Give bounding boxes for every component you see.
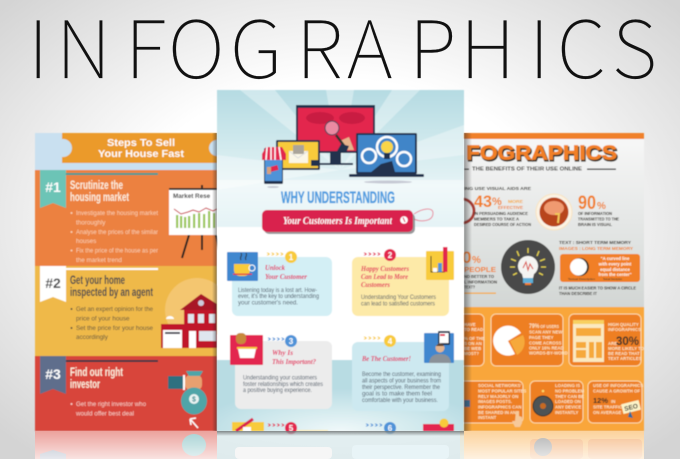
card 1: Listening today is a lost art. How- [238,288,317,294]
step 1: the market trend [76,257,122,264]
card 4: comfortable with your business. [362,398,438,404]
stat people: L INFORMATION [464,280,498,284]
box: site traffic: SITE TRAFFIC [593,404,622,410]
box: loading speed: NO PROBLEM [555,388,585,394]
icon: hand holding money bag: $ [192,396,196,404]
card 4: Be The Customer! [361,354,411,363]
box: partial read [458,314,485,366]
step 2: Get your home [70,273,125,287]
box: loading speed: ANY DEVICE [555,404,581,410]
card 1: Your Customer [265,272,307,281]
box: pie chart: ONLY 16% READ [529,346,564,350]
step 2: #2 [45,275,61,291]
memory comparison: Textual Description [568,277,595,281]
stat 43%: 43 [474,192,492,211]
card 2: Customers [361,280,390,289]
card 4: all aspects of your business from [362,378,441,384]
card 2: ›››› [363,251,382,258]
box: site traffic: IN [611,399,615,404]
step 1: Fix the price of the house as per [76,248,158,254]
box: site traffic: ON AVERAGE [593,410,622,415]
icon: hand holding money bag [168,371,207,414]
memory comparison: Textual Description [603,277,622,281]
stat 43%: DESIRED COURSE OF ACTION [474,222,532,227]
box: social networks [458,381,526,427]
memory comparison: IT IS MUCH EASIER TO SHOW A CIRCLE [559,286,636,290]
box: pie chart: COME ACROSS [529,340,561,346]
stat people: 0 [462,248,471,267]
step 2 [35,266,229,356]
stat 43%: IN PERSUADING AUDIENCE [474,211,528,216]
memory comparison: equal distance [600,267,631,272]
card 3: Why Is [272,348,293,357]
box: site traffic: USE OF INFOGRAPHICS [593,383,643,388]
box: social networks: INSTANT [478,415,497,420]
box: loading speed: LOADING IS [555,383,580,388]
memory comparison: TEXT : SHORT TERM MEMORY [559,240,631,245]
card 3: foster relationships which creates [243,382,323,388]
box: 30% more likely: 30% [616,336,639,348]
stat 43%: EFFECTIVE [498,205,523,210]
box: 30% more likely: INFOGRAPHICS [608,327,641,332]
market research board [169,185,219,258]
step 3: #3 [45,366,61,382]
card 6 partial: 6 [388,424,393,433]
card 5 partial: 5 [289,424,294,433]
box: site traffic: CAUSE A GROWTH OF [593,388,640,394]
card 2 [352,247,454,316]
card 1: 1 [289,253,294,262]
card 4 [352,331,454,411]
box: partial read: TO READ [464,327,483,332]
step 1: Investigate the housing market [76,210,158,217]
card 2: Happy Customers [360,264,409,273]
box: pie chart: PAGE THEY [529,335,554,340]
card 4: Become the customer, examining [362,372,441,378]
card 4: 4 [388,337,393,346]
box: partial read: S ON AN [464,341,482,346]
card 1: ›››› [266,251,285,258]
statistics band [458,307,645,431]
stat 43%: MEMBERS TO TAKE A [474,216,520,222]
step 3 [35,356,217,431]
heading: FOGRAPHICS [467,144,618,166]
banner: your customers is important: Your Customers Is Important [283,216,393,227]
box: social networks: RELY MAJORLY ON [478,394,518,399]
step 1 [35,170,217,266]
step 3: would offer best deal [75,410,134,418]
stat people: PEOPLE [464,267,496,274]
box: loading speed: LOADED ON [555,399,581,404]
heading: why understanding: WHY UNDERSTANDING [281,189,395,207]
panel: why understanding your customers [212,90,472,434]
card 2: can lead to satisfied customers [361,302,435,308]
market research board: Market Rese [173,193,211,200]
step 3: Get the right investor who [76,401,146,408]
box: partial read: BE WEB [464,346,481,351]
box: pie chart: WORDS-BY-WORD [529,350,568,356]
header banner: Steps To Sell [107,137,175,149]
box: 30% more likely [569,314,645,366]
memory comparison: from the center" [598,272,632,277]
icon: small arrow [190,418,198,428]
card 5 partial [232,419,328,434]
memory comparison: THAN DESCRIBE IT [559,291,597,296]
icon: phone with shop awning [262,147,286,188]
box: partial read: % OF THE [464,336,485,341]
stat 43%: ING USE VISUAL AIDS ARE [464,186,531,191]
reflection: left panel [35,431,217,459]
card 3 [230,333,332,409]
step 1: housing market [70,190,129,204]
stat 43%: % [492,196,502,208]
stat people: % [472,255,481,266]
box: social networks: INFOGRAPHICS CAN [478,404,521,410]
banner: your customers is important [262,209,433,234]
card 1 [227,251,332,316]
box: pie chart [491,314,568,366]
card 2: Can Lead to More [361,272,409,281]
card 3: ›››› [267,336,286,343]
stat 43%: MORE [508,199,523,204]
hero background [217,90,464,227]
memory comparison: with every point [598,262,632,266]
card 3: Understanding your customers [243,376,317,382]
card 2: Understanding Your Customers [361,295,436,301]
stat 90%: TRANSMITTED TO THE [578,216,619,222]
stat 90% [578,193,619,227]
box: social networks: BE SHARED IN AN [478,410,516,415]
card 3: 3 [289,337,294,346]
card 1: Unlock [265,263,285,272]
step 1: #1 [45,179,61,195]
step 1: houses [76,238,96,245]
icon: light bulb [501,240,555,294]
stat 90%: % [597,201,606,212]
red house [161,294,217,348]
stat people: TEXT? [464,284,475,290]
panel: steps to sell your house [35,133,229,431]
step 2: Get an expert opinion for the [76,306,153,313]
icon: brain [536,194,572,230]
step 2: price of your house [76,316,130,322]
step 1: Scrutinize the [70,178,123,192]
stat 90%: BRAIN IS VISUAL [578,222,612,227]
stat 43% [450,186,532,227]
card 6 partial [365,418,454,434]
step 3: investor [70,377,100,391]
card 4: ›››› [363,335,382,342]
box: loading speed: INSTANTLY [555,410,579,415]
step 2: Set the price for your house [76,325,153,332]
box: loading speed: THEY CAN BE [555,394,584,399]
card 1: ever, it's the key to understanding [238,294,319,300]
box: social networks: IMAGES POSTS. [478,399,512,404]
card 3: This Important? [272,357,316,366]
reflection: center panel [217,431,464,459]
box: partial read: HAVE [464,322,476,327]
memory comparison: "A curved line [601,256,630,261]
step 2: accordingly [76,334,109,341]
icon: tablet with envelope [276,140,320,170]
step 2: inspected by an agent [70,285,153,299]
box: site traffic: 12% [593,396,608,405]
step 1: Analyse the prices of the similar [76,229,158,236]
step 1: thoroughly [76,220,106,226]
box: 30% more likely: TEXT ARTICLES [608,356,642,361]
card 6 partial: ›››› [365,422,384,429]
panel: benefits of infographics [450,133,645,431]
card 5 partial: ›››› [267,422,286,429]
stat people: ND BETTER TO [464,274,494,279]
box: social networks: SOCIAL NETWORKS' [478,383,521,388]
box: site traffic [588,381,643,423]
card 4: their perspective. Remember the [362,385,441,391]
step 3: Find out right [70,365,123,379]
box: loading speed [530,381,585,423]
heading: FOGRAPHICS [466,142,617,164]
subtitle: THE BENEFITS OF THEIR USE ONLINE [472,166,583,172]
header banner [54,133,225,163]
box: 30% more likely: ARE [608,341,617,346]
icon: laptop with lightbulb and gears [349,133,424,184]
card 2: 2 [388,251,393,260]
box: pie chart: SCAN ANY NEW [529,330,563,334]
icon: desktop monitor [296,105,375,165]
stat 90%: 90 [578,193,596,214]
card 4: goal is to make them feel [362,392,432,398]
box: social networks: MOST POPULAR SITES [478,388,526,394]
card 3: a positive buying experience. [243,388,312,394]
box: pie chart: 79% OF USERS [529,324,559,330]
stat 90%: OF INFORMATION [578,211,613,216]
reflection: right panel [460,431,644,459]
memory comparison: IMAGES : LONG TERM MEMORY [559,246,633,251]
box: 30% more likely: HIGH QUALITY [608,322,639,327]
box: 30% more likely: BE READ THAT [608,351,640,356]
memory comparison [559,240,640,296]
box: site traffic: SEO [624,403,639,413]
card 1: your customer's need. [238,300,298,306]
header banner: Your House Fast [98,148,185,160]
stat people [462,248,498,294]
box: 30% more likely: MORE LIKELY TO [608,346,645,351]
box: partial read: MOST? [464,351,479,356]
